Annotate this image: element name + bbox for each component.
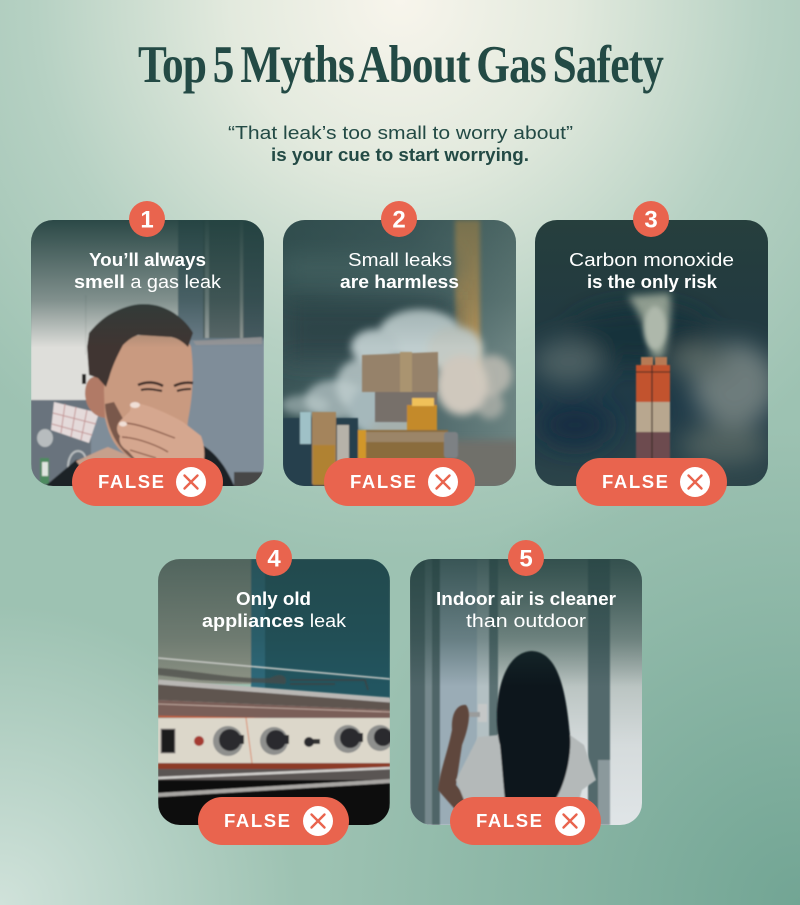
badge 2 (381, 201, 417, 237)
subtitle: is your cue to start worrying. (271, 144, 529, 165)
myth heading: Carbon monoxide (569, 249, 734, 270)
badge 5: 5 (519, 546, 533, 572)
false pill (450, 797, 601, 845)
title: Top 5 Myths About Gas Safety (138, 36, 663, 94)
badge 3 (633, 201, 669, 237)
false pill: FALSE (350, 471, 416, 492)
badge 2: 2 (392, 206, 406, 234)
false pill (198, 797, 349, 845)
badge 1: 1 (140, 206, 154, 234)
photo: old gas stove (158, 559, 393, 828)
panel: myth 4 (158, 540, 393, 845)
myth heading: is the only risk (587, 271, 718, 292)
false pill: FALSE (224, 810, 290, 831)
false pill (324, 458, 475, 506)
myth heading: appliances leak (202, 610, 347, 631)
photo: steaming brass valve (281, 220, 520, 490)
badge 1 (129, 201, 165, 237)
myth heading (436, 588, 616, 631)
myth heading (340, 249, 459, 292)
false pill: FALSE (98, 471, 164, 492)
badge 4 (256, 540, 292, 576)
myth heading: Small leaks (348, 249, 452, 270)
false pill: FALSE (602, 471, 668, 492)
myth heading (74, 249, 222, 292)
photo: woman at a window (410, 559, 642, 825)
badge 4: 4 (267, 546, 281, 572)
myth heading: You’ll always (89, 249, 206, 270)
photo: smoking chimney (534, 220, 777, 486)
subtitle (228, 122, 573, 165)
panel: myth 5 (410, 540, 642, 845)
false pill (72, 458, 223, 506)
myth heading: are harmless (340, 271, 459, 292)
myth heading: Indoor air is cleaner (436, 588, 616, 609)
badge 3: 3 (644, 206, 658, 234)
myth heading (202, 588, 347, 631)
myth heading: smell a gas leak (74, 271, 222, 292)
myth heading: than outdoor (466, 610, 586, 631)
panel: myth 2 (281, 201, 520, 506)
myth heading: Only old (236, 588, 311, 609)
false pill (576, 458, 727, 506)
badge 5 (508, 540, 544, 576)
panel: myth 1 (31, 201, 264, 506)
myth heading (569, 249, 734, 292)
photo: man covering his nose (31, 220, 264, 490)
panel: myth 3 (534, 201, 777, 506)
false pill: FALSE (476, 810, 542, 831)
subtitle: “That leak’s too small to worry about” (228, 122, 573, 143)
